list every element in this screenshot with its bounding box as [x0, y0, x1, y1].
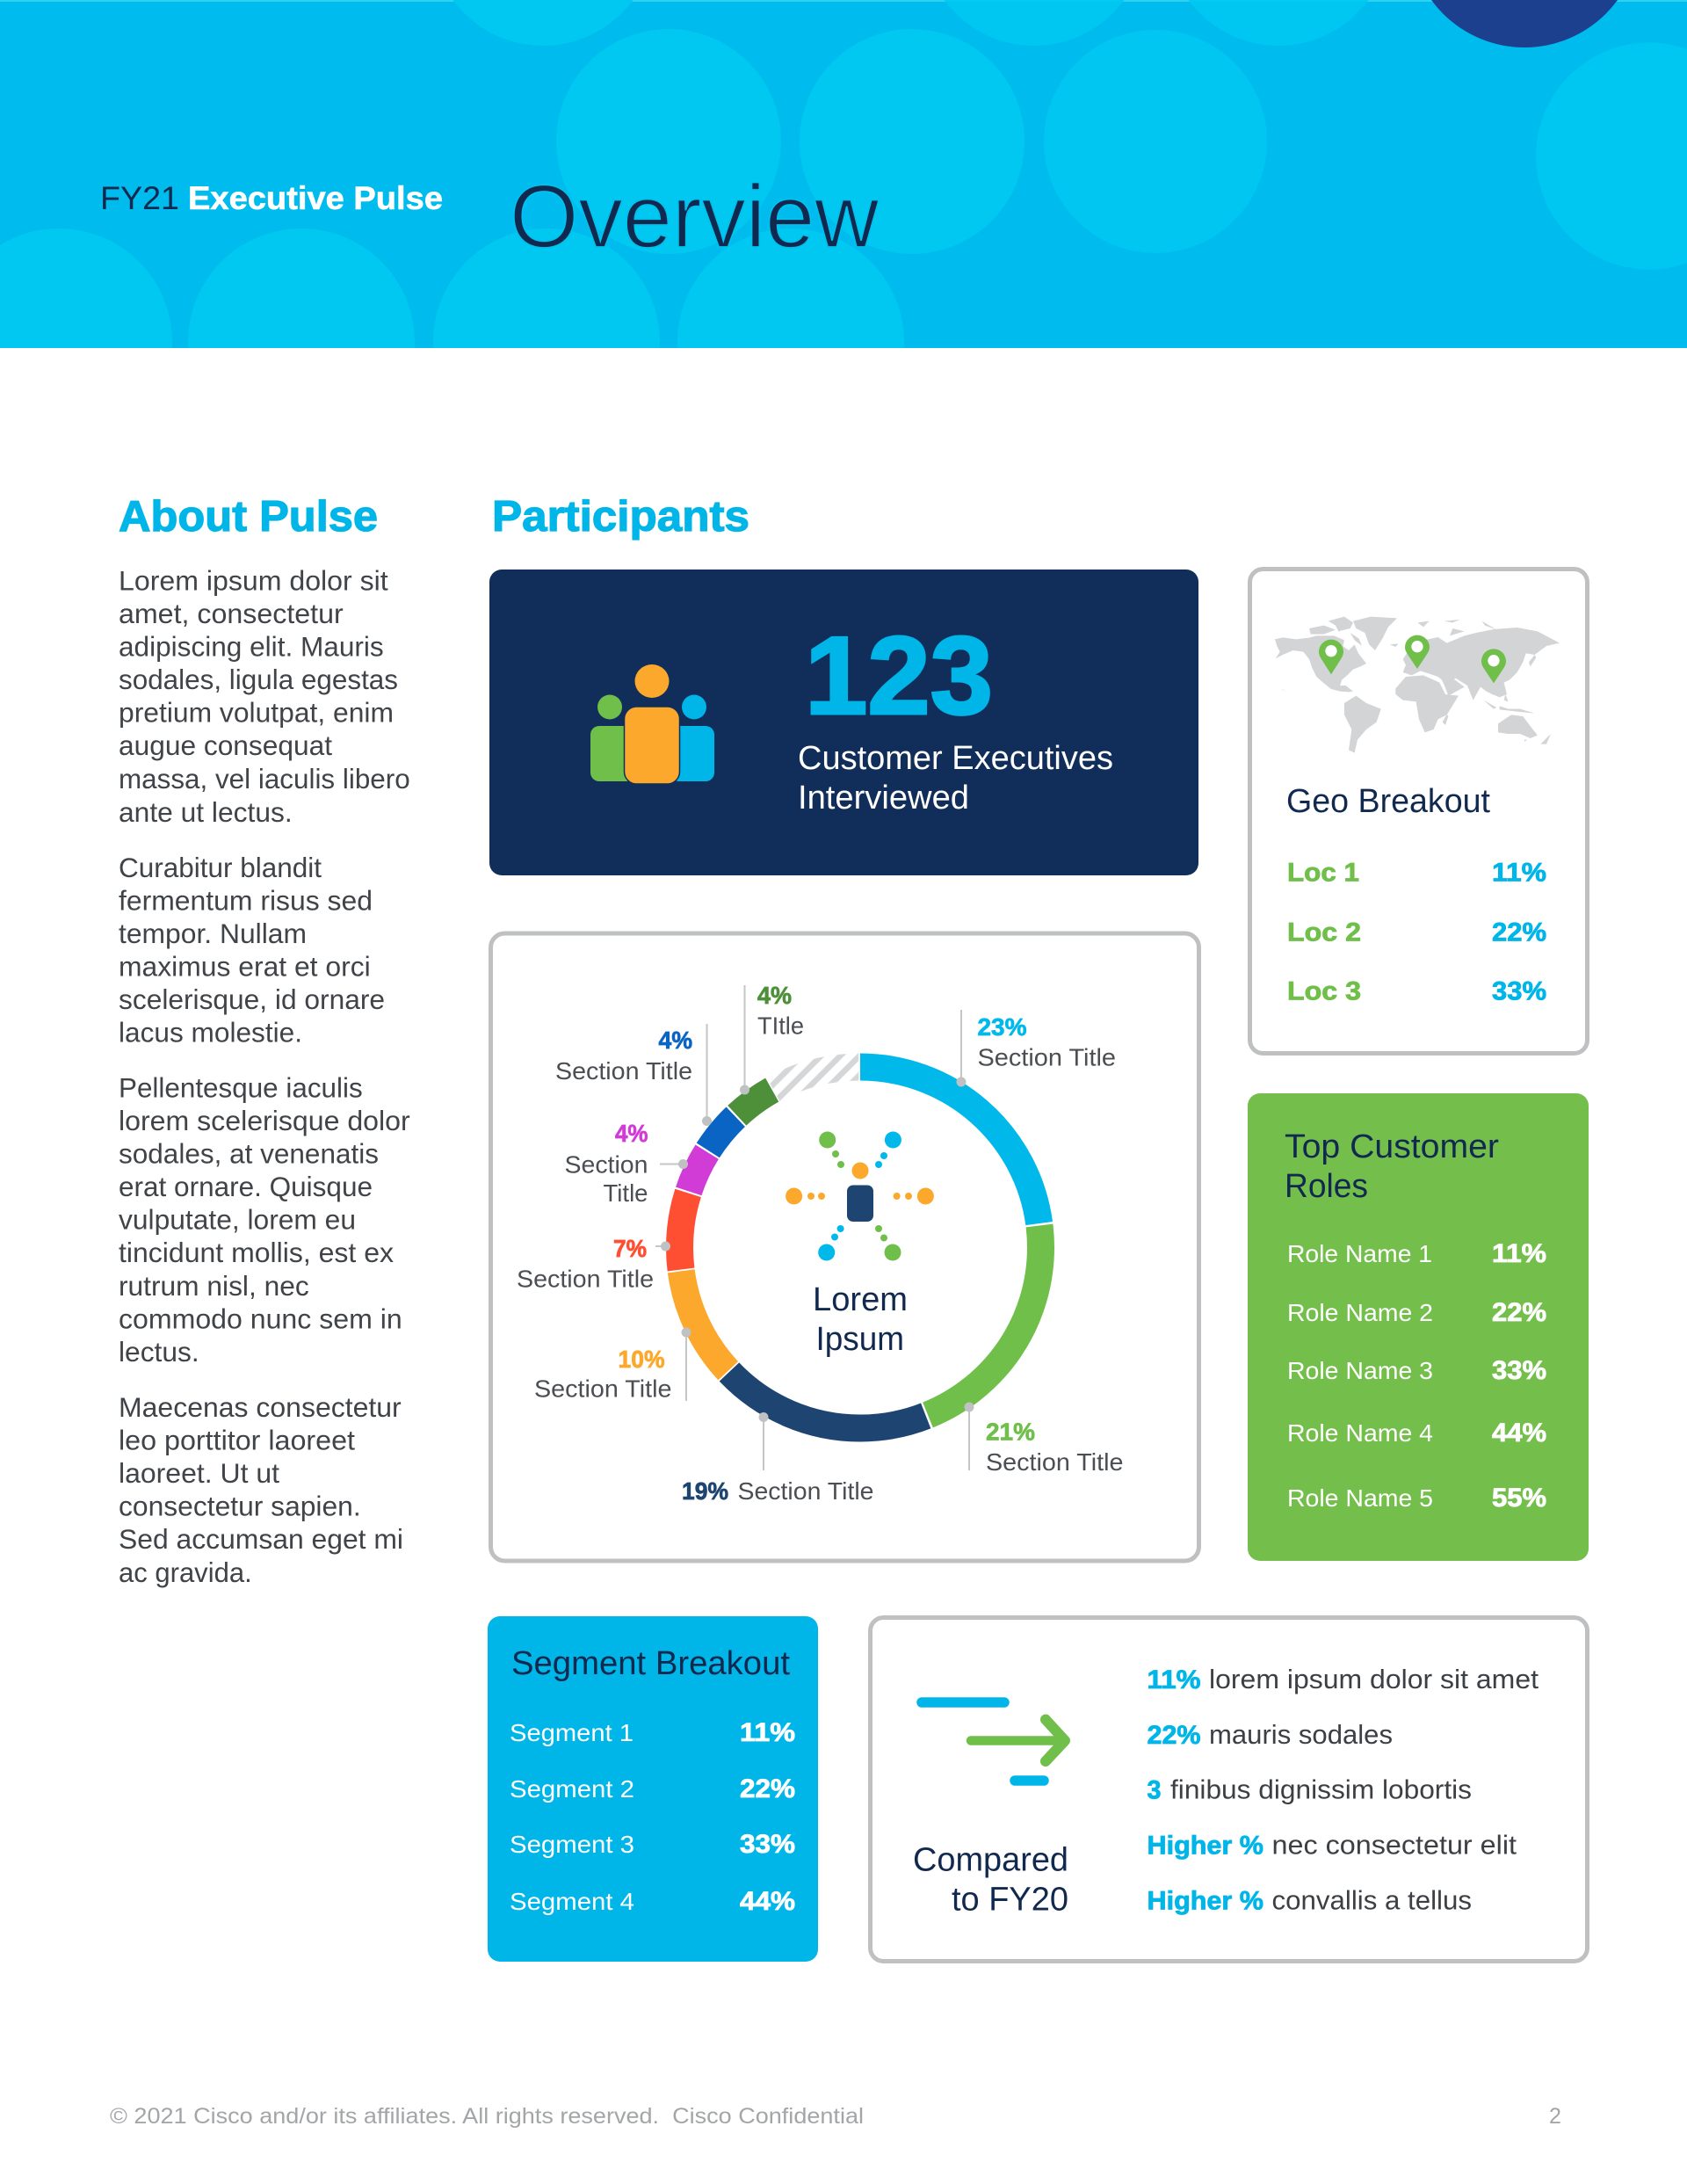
row: Segment 2	[510, 1774, 795, 1803]
row: Loc 3	[1287, 977, 1546, 1005]
row: Role Name 4	[1287, 1419, 1546, 1448]
text block: about pulse: Sed accumsan eget mi	[119, 1523, 403, 1555]
text block: about pulse: sodales, ligula egestas	[119, 664, 398, 695]
heading: Participants: Participants	[492, 493, 749, 541]
callout: 7% Section Title	[517, 1235, 670, 1292]
row: Role Name 2	[1287, 1298, 1546, 1327]
row: Role Name 5: Role Name 5	[1287, 1484, 1433, 1512]
row: Role Name 4: Role Name 4	[1287, 1419, 1433, 1447]
panel: top customer roles	[1248, 1093, 1589, 1561]
comparison line 2: mauris sodales	[1209, 1719, 1393, 1750]
text block: about pulse: erat ornare. Quisque	[119, 1171, 373, 1202]
footer: copyright: © 2021 Cisco and/or its affiliates. All rights reserved. Cisco Confidential	[110, 2104, 864, 2129]
callout: 23% Section Title	[956, 1010, 1116, 1086]
callout: 19% Section Title: Section Title	[738, 1477, 873, 1505]
row: Loc 1: 11%	[1492, 858, 1546, 888]
row: Role Name 5	[1287, 1484, 1546, 1513]
eyebrow: FY21 Executive Pulse: Executive Pulse	[188, 180, 443, 216]
donut ring segments	[680, 1067, 1040, 1428]
text block: about pulse: ac gravida.	[119, 1556, 252, 1588]
comparison line 2: 22%	[1148, 1721, 1200, 1750]
text block: about pulse: lacus molestie.	[119, 1016, 302, 1048]
text block: about pulse: ante ut lectus.	[119, 796, 293, 828]
row: Loc 1	[1287, 858, 1546, 888]
callout: 4% Section Title blue: Section Title	[555, 1057, 692, 1085]
row: Role Name 3	[1287, 1356, 1546, 1385]
row: Role Name 5: 55%	[1492, 1484, 1546, 1513]
caption: Customer Executives Interviewed: Customer Executives	[798, 740, 1113, 777]
callout: 4% Section Title blue: 4%	[659, 1027, 692, 1054]
callout: 4% Section Title blue	[555, 1024, 712, 1126]
text block: about pulse: rutrum nisl, nec	[119, 1270, 309, 1302]
callout: 4% TItle green: 4%	[757, 982, 792, 1009]
icon: arrow between bars	[922, 1702, 1065, 1781]
text block: about pulse: pretium volutpat, enim	[119, 696, 394, 728]
text block: about pulse: Curabitur blandit	[119, 852, 322, 883]
row: Segment 3	[510, 1830, 795, 1859]
icon: three people	[590, 664, 714, 784]
heading: About Pulse: About Pulse	[119, 493, 378, 541]
footer: page number: 2	[1549, 2104, 1561, 2129]
text block: about pulse: massa, vel iaculis libero	[119, 763, 410, 795]
row: Segment 2: Segment 2	[510, 1775, 634, 1803]
panel title: Segment Breakout: Segment Breakout	[511, 1645, 790, 1682]
caption: Customer Executives Interviewed	[798, 740, 1113, 816]
panel title: Geo Breakout: Geo Breakout	[1286, 783, 1490, 820]
comparison line 5	[1148, 1884, 1472, 1916]
text block: about pulse: tincidunt mollis, est ex	[119, 1237, 394, 1268]
text block: about pulse: adipiscing elit. Mauris	[119, 631, 384, 663]
comparison line 4: nec consectetur elit	[1272, 1830, 1517, 1860]
callout: 4% TItle green: TItle	[757, 1012, 804, 1039]
label: Compared to FY20	[913, 1842, 1068, 1918]
comparison line 3: finibus dignissim lobortis	[1170, 1774, 1472, 1805]
text block: about pulse	[119, 564, 410, 1588]
text block: about pulse: laoreet. Ut ut	[119, 1457, 279, 1489]
text block: about pulse: Lorem ipsum dolor sit	[119, 564, 388, 596]
callout: 4% Section Title magenta: Title	[603, 1179, 648, 1207]
panel: donut chart	[490, 933, 1198, 1561]
callout: 21% Section Title: 21%	[986, 1419, 1035, 1445]
text block: about pulse: consectetur sapien.	[119, 1491, 361, 1522]
row: Segment 4	[510, 1887, 795, 1916]
panel title: Top Customer Roles: Top Customer	[1285, 1128, 1499, 1165]
row: Loc 3: 33%	[1492, 977, 1546, 1005]
row: Loc 1: Loc 1	[1287, 858, 1359, 888]
decorative navy circle	[1409, 0, 1640, 47]
callout: 10% Section Title: 10%	[619, 1346, 665, 1373]
row: Segment 4: 44%	[740, 1887, 795, 1916]
text block: about pulse: scelerisque, id ornare	[119, 983, 385, 1015]
eyebrow: FY21 Executive Pulse: FY21	[100, 180, 179, 216]
center icon: hub with radiating dots	[786, 1132, 934, 1260]
callout: 4% Section Title magenta	[564, 1120, 688, 1207]
callout: 7% Section Title: 7%	[613, 1235, 647, 1262]
row: Segment 1: Segment 1	[510, 1719, 634, 1746]
row: Loc 2	[1287, 918, 1546, 947]
text block: about pulse: maximus erat et orci	[119, 951, 371, 983]
big number: 123: 123	[805, 613, 993, 737]
panel: customer executives interviewed	[489, 570, 1198, 875]
callout: 19% Section Title: 19%	[682, 1477, 728, 1505]
row: Role Name 1: 11%	[1492, 1239, 1546, 1268]
row: Loc 2: Loc 2	[1287, 918, 1361, 947]
comparison line 5: convallis a tellus	[1272, 1884, 1472, 1916]
label: Compared to FY20: Compared	[913, 1842, 1068, 1879]
center label: Lorem Ipsum: Ipsum	[815, 1321, 904, 1358]
panel: segment breakout	[488, 1616, 818, 1962]
callout: 4% Section Title magenta: 4%	[615, 1120, 648, 1147]
center label: Lorem Ipsum	[813, 1281, 908, 1358]
callout: 19% Section Title	[682, 1412, 873, 1505]
callout: 23% Section Title: 23%	[977, 1013, 1027, 1041]
comparison line 3: 3	[1148, 1775, 1162, 1805]
comparison line 1: lorem ipsum dolor sit amet	[1209, 1664, 1539, 1694]
row: Loc 2: 22%	[1492, 918, 1546, 947]
text block: about pulse: Pellentesque iaculis	[119, 1072, 363, 1104]
row: Role Name 1	[1287, 1239, 1546, 1268]
callout: 10% Section Title	[534, 1327, 691, 1403]
callout: 21% Section Title: Section Title	[986, 1448, 1123, 1476]
row: Role Name 3: Role Name 3	[1287, 1357, 1433, 1384]
panel title: Top Customer Roles	[1285, 1128, 1499, 1205]
row: Segment 3: 33%	[740, 1830, 795, 1859]
comparison line 5: Higher %	[1148, 1886, 1263, 1916]
callout: 21% Section Title	[965, 1403, 1123, 1476]
text block: about pulse: commodo nunc sem in	[119, 1302, 402, 1334]
callout: 23% Section Title: Section Title	[977, 1044, 1116, 1070]
row: Segment 2: 22%	[740, 1774, 795, 1803]
text block: about pulse: sodales, at venenatis	[119, 1137, 379, 1169]
row: Role Name 1: Role Name 1	[1287, 1240, 1432, 1267]
panel: compared to FY20	[870, 1617, 1587, 1962]
callout: 4% TItle green	[740, 982, 804, 1095]
comparison line 1: 11%	[1148, 1665, 1200, 1694]
panel: geo breakout	[1249, 570, 1587, 1053]
callout: 4% Section Title magenta: Section	[564, 1151, 648, 1178]
label: Compared to FY20: to FY20	[952, 1881, 1068, 1918]
row: Segment 1	[510, 1718, 795, 1747]
comparison line 4: Higher %	[1148, 1832, 1263, 1860]
text block: about pulse: vulputate, lorem eu	[119, 1204, 356, 1236]
caption: Customer Executives Interviewed: Interviewed	[798, 780, 969, 816]
callout: 7% Section Title: Section Title	[517, 1266, 654, 1292]
text block: about pulse: amet, consectetur	[119, 598, 344, 629]
row: Role Name 4: 44%	[1492, 1419, 1546, 1448]
text block: about pulse: fermentum risus sed	[119, 884, 373, 916]
row: Loc 3: Loc 3	[1287, 977, 1361, 1005]
header banner	[0, 0, 1687, 348]
text block: about pulse: Maecenas consectetur	[119, 1391, 402, 1423]
callout: 10% Section Title: Section Title	[534, 1375, 671, 1403]
comparison line 4	[1148, 1830, 1517, 1860]
row: Role Name 3: 33%	[1492, 1356, 1546, 1385]
text block: about pulse: augue consequat	[119, 729, 332, 761]
text block: about pulse: lectus.	[119, 1336, 199, 1368]
row: Segment 1: 11%	[740, 1718, 795, 1747]
text block: about pulse: leo porttitor laoreet	[119, 1424, 355, 1455]
world map with location pins	[1275, 617, 1560, 753]
donut ring hatched remainder	[773, 1067, 858, 1089]
panel title: Top Customer Roles: Roles	[1285, 1168, 1368, 1205]
row: Role Name 2: 22%	[1492, 1298, 1546, 1327]
center label: Lorem Ipsum: Lorem	[813, 1281, 908, 1318]
text block: about pulse: lorem scelerisque dolor	[119, 1105, 410, 1136]
page title: Overview: Overview	[510, 168, 880, 266]
row: Role Name 2: Role Name 2	[1287, 1299, 1433, 1326]
row: Segment 4: Segment 4	[510, 1888, 634, 1915]
text block: about pulse: tempor. Nullam	[119, 918, 307, 949]
row: Segment 3: Segment 3	[510, 1831, 634, 1858]
